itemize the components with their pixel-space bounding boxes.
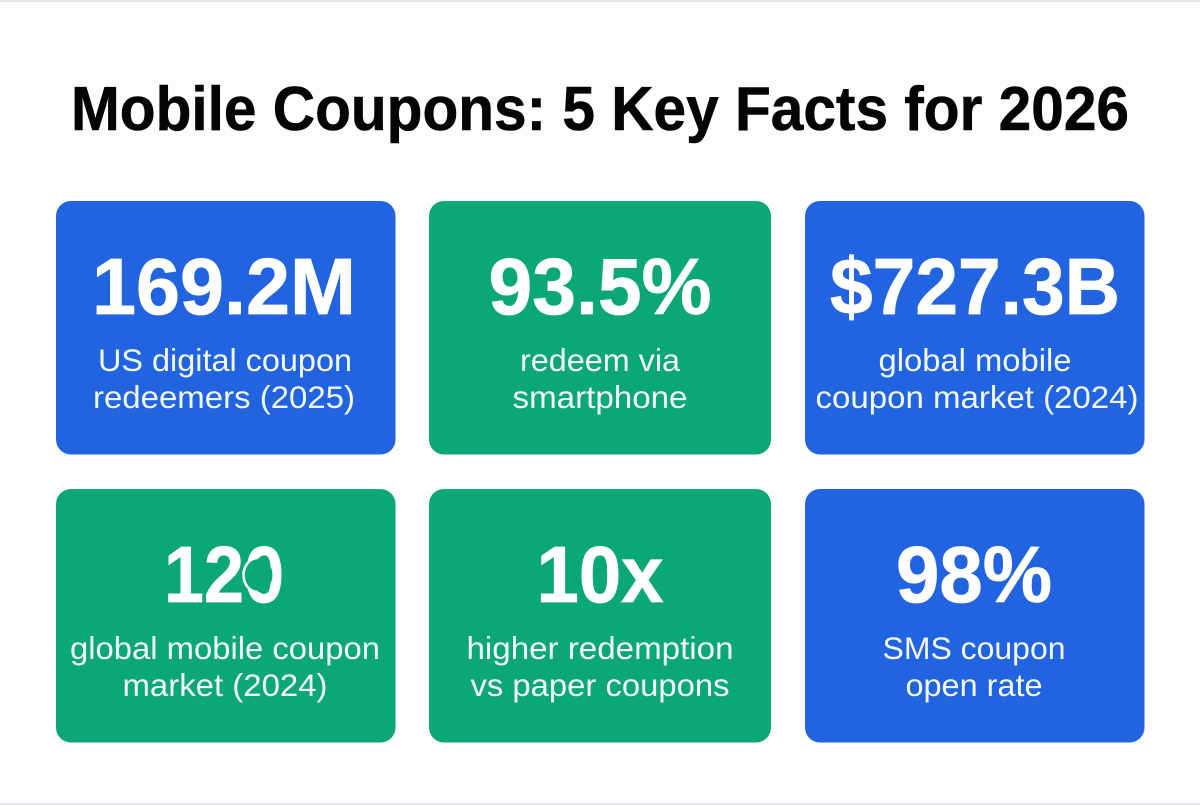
label: SMS coupon open rate: SMS coupon [882, 630, 1066, 666]
label: redeem via smartphone: smartphone [512, 379, 688, 415]
label: redeem via smartphone: redeem via [520, 342, 680, 378]
label: SMS coupon open rate [882, 630, 1066, 703]
stat: $727.3B: $727.3B [830, 242, 1120, 331]
label: global mobile coupon market (2024): global mobile [878, 342, 1072, 378]
label: global mobile coupon market (2024): global mobile coupon [70, 630, 380, 666]
label: redeem via smartphone [512, 342, 688, 415]
stat: 10x: 10x [536, 530, 664, 619]
panel: US digital coupon redeemers [56, 201, 396, 454]
title: Mobile Coupons: 5 Key Facts for 2026 [71, 75, 1129, 144]
label: US digital coupon redeemers (2025) [93, 342, 355, 415]
stat: 169.2M: 169.2M [92, 242, 356, 331]
label: US digital coupon redeemers (2025): redeemers (2025) [93, 379, 355, 415]
label: global mobile coupon market (2024): coupon market (2024) [816, 379, 1138, 415]
label: global mobile coupon market (2024): market (2024) [122, 667, 328, 703]
label: higher redemption vs paper coupons: higher redemption [466, 630, 734, 666]
panel: global mobile coupon market [805, 201, 1144, 454]
panel: 120 global mobile coupon market [56, 489, 396, 742]
label: SMS coupon open rate: open rate [906, 667, 1042, 703]
label: US digital coupon redeemers (2025): US digital coupon [98, 342, 352, 378]
label: higher redemption vs paper coupons: vs paper coupons [470, 667, 730, 703]
stat: 98%: 98% [896, 530, 1052, 619]
panel: 10x higher redemption [429, 489, 771, 742]
label: global mobile coupon market (2024) [70, 630, 380, 703]
panel: SMS coupon open rate [805, 489, 1144, 742]
stat: 93.5%: 93.5% [488, 242, 712, 331]
panel: redeem via smartphone [429, 201, 771, 454]
label: higher redemption vs paper coupons [466, 630, 734, 703]
label: global mobile coupon market (2024) [816, 342, 1138, 415]
stat: 120: 120 [164, 530, 284, 619]
